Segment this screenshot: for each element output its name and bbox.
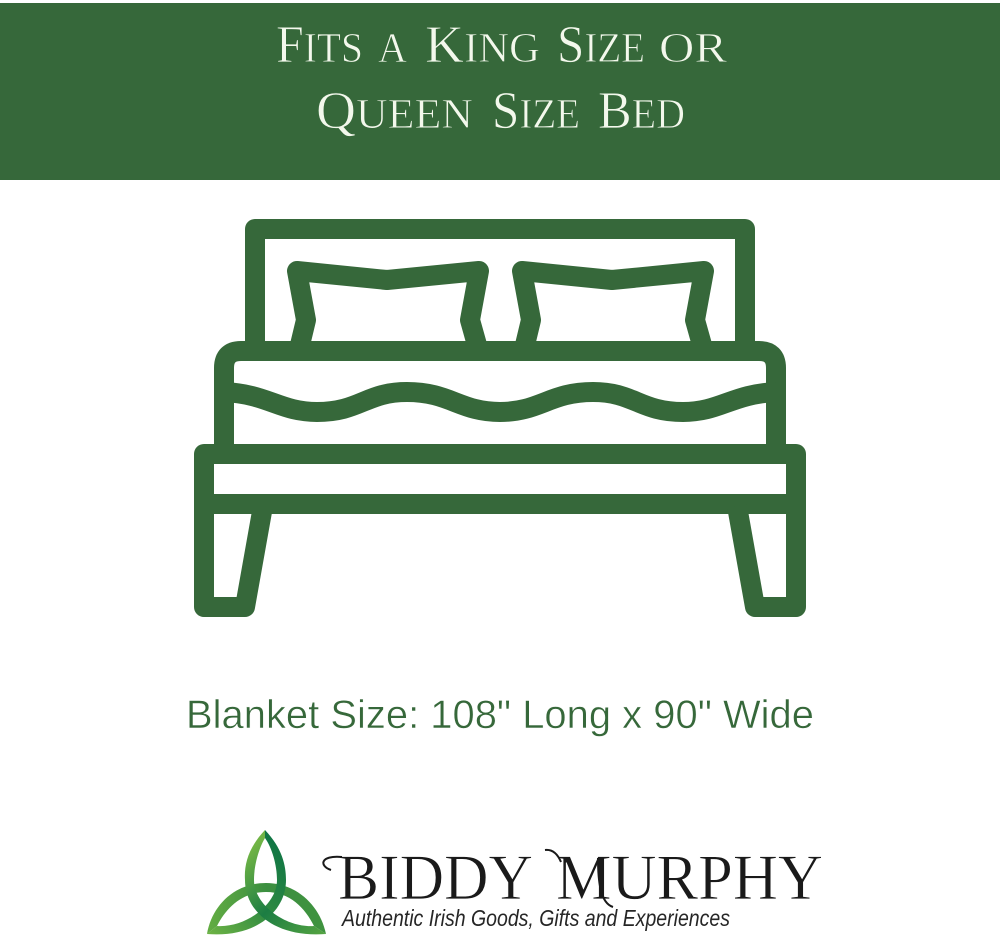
right leg — [737, 504, 796, 607]
title line 1: FITS — [276, 16, 363, 74]
title line 1 — [276, 16, 727, 74]
icon: bed — [204, 229, 796, 607]
title banner — [0, 3, 1000, 180]
title line 1: OR — [659, 26, 727, 72]
mattress — [224, 351, 776, 445]
left leg — [204, 504, 263, 607]
title line 1: KING — [425, 16, 540, 74]
icon: triquetra knot — [207, 830, 326, 934]
title line 2: QUEEN — [316, 82, 473, 140]
logo — [207, 830, 823, 934]
title line 2: BED — [598, 82, 685, 140]
brand name: MURPHY — [556, 842, 823, 914]
title line 2: SIZE — [492, 82, 580, 140]
left pillow — [297, 271, 479, 345]
blanket size text: Blanket Size: 108" Long x 90" Wide — [186, 693, 814, 737]
headboard — [255, 229, 745, 345]
title line 1: SIZE — [557, 16, 645, 74]
brand name: BIDDY — [338, 842, 533, 914]
blanket wave — [224, 392, 776, 412]
title line 2 — [316, 82, 685, 140]
right pillow — [522, 271, 704, 345]
title line 1: A — [378, 26, 408, 72]
bed frame — [204, 454, 796, 504]
brand name — [323, 842, 823, 914]
tagline: Authentic Irish Goods, Gifts and Experiences — [340, 905, 730, 931]
